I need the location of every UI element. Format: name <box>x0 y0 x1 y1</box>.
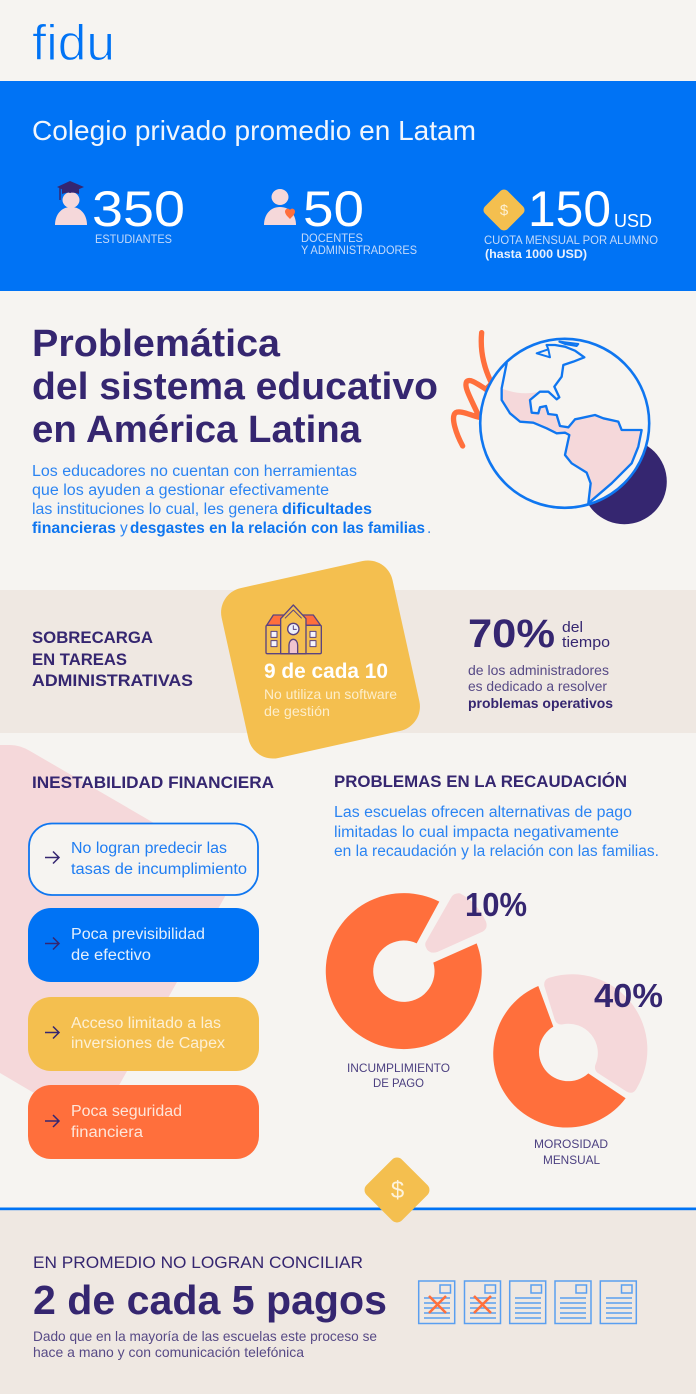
text block: alternativas <box>334 804 659 860</box>
chart: incumplimiento de pago: INCUMPLIMIENTO <box>347 1061 450 1075</box>
chart: morosidad mensual: 40% <box>594 977 663 1014</box>
card: 9 de cada 10: 9 de cada 10 <box>264 660 388 683</box>
text block: educadores: desgastes en la relación con las familias <box>130 520 425 537</box>
heading: sobrecarga <box>32 628 193 690</box>
stat: 350 estudiantes: 350 <box>92 181 185 237</box>
panel: problemas en la recaudación <box>326 772 663 1167</box>
icon: dollar diamond <box>481 187 527 233</box>
icon: teacher <box>264 189 296 225</box>
text block: educadores: financieras <box>32 520 116 537</box>
chart: incumplimiento de pago <box>326 886 527 1090</box>
icon: dollar diamond large: $ <box>391 1177 404 1204</box>
card: previsibilidad: de efectivo <box>71 947 151 964</box>
text block: 2 de cada 5 pagos: EN PROMEDIO NO LOGRAN CONCILIAR <box>33 1253 363 1272</box>
stat: 50 docentes: 50 <box>303 181 364 237</box>
illustration: globe <box>454 333 667 524</box>
icon: document 5 <box>600 1281 636 1324</box>
card: capex: Acceso limitado a las <box>71 1015 221 1032</box>
text block: educadores: las instituciones lo cual, les genera <box>32 501 278 518</box>
heading: problemática: en América Latina <box>32 409 362 451</box>
stat: 150 USD: (hasta 1000 USD) <box>485 247 587 261</box>
heading: recaudación: PROBLEMAS EN LA RECAUDACIÓN <box>334 772 627 791</box>
text block: educadores: dificultades <box>282 501 372 518</box>
text block: educadores: que los ayuden a gestionar efectivamente <box>32 482 329 499</box>
text block: 2 de cada 5 pagos <box>33 1253 387 1360</box>
icon: school <box>266 605 321 654</box>
card: seguridad <box>28 1085 259 1159</box>
logo: fidu: fidu <box>32 15 115 71</box>
chart: morosidad mensual: MENSUAL <box>543 1153 600 1167</box>
stat: 150 USD: 150 <box>528 181 611 237</box>
card: 9 de cada 10: de gestión <box>264 703 330 719</box>
stat: 150 USD: USD <box>614 211 652 231</box>
stat: 50 docentes: DOCENTES <box>301 231 363 245</box>
stat: 50 docentes: Y ADMINISTRADORES <box>301 243 417 257</box>
text block: educadores: y <box>120 520 128 537</box>
panel: inestabilidad financiera <box>28 773 274 1159</box>
text block: alternativas: limitadas lo cual impacta negativamente <box>334 824 619 841</box>
chart: morosidad mensual: MOROSIDAD <box>534 1137 608 1151</box>
icon: rejected document 2 <box>464 1281 500 1324</box>
card: tasas de incumplimiento: tasas de incumplimiento <box>71 861 247 878</box>
card: 9 de cada 10 <box>216 556 425 763</box>
text block: alternativas: Las escuelas ofrecen alternativas de pago <box>334 804 632 821</box>
stat: 70% del tiempo: del <box>562 619 583 636</box>
heading: sobrecarga: ADMINISTRATIVAS <box>32 671 193 690</box>
card: capex: inversiones de Capex <box>71 1035 225 1052</box>
card: capex <box>28 997 259 1071</box>
card: seguridad: Poca seguridad <box>71 1103 182 1120</box>
chart: morosidad mensual <box>493 974 663 1167</box>
card: 9 de cada 10: No utiliza un software <box>264 686 397 702</box>
stat: 70% del tiempo: 70% <box>468 612 555 656</box>
text block: educadores: Los educadores no cuentan con herramientas <box>32 463 357 480</box>
stat: 70% del tiempo: tiempo <box>562 634 610 651</box>
squiggle <box>454 333 492 446</box>
heading: inestabilidad: INESTABILIDAD FINANCIERA <box>32 773 274 792</box>
icon: dollar diamond large <box>362 1155 432 1225</box>
chart: incumplimiento de pago: 10% <box>465 886 527 923</box>
text block: educadores <box>32 463 431 537</box>
stat: 50 docentes <box>301 181 417 257</box>
card: tasas de incumplimiento: No logran predecir las <box>71 840 227 857</box>
heading: problemática: Problemática <box>32 323 281 365</box>
card: tasas de incumplimiento <box>29 824 258 895</box>
heading: problemática <box>32 323 438 451</box>
stat: 70% del tiempo: es dedicado a resolver <box>468 678 607 694</box>
panel: conciliar band <box>0 1209 696 1394</box>
heading: sobrecarga: SOBRECARGA <box>32 628 153 647</box>
heading: colegio privado: Colegio privado promedio en Latam <box>32 115 476 146</box>
icon: rejected document 1 <box>419 1281 455 1324</box>
stat: 150 USD <box>484 181 658 261</box>
card: previsibilidad <box>28 908 259 982</box>
icon: document 4 <box>555 1281 591 1324</box>
chart: incumplimiento de pago: DE PAGO <box>373 1076 424 1090</box>
text block: 2 de cada 5 pagos: 2 de cada 5 pagos <box>33 1277 387 1323</box>
panel: colegio privado promedio <box>0 81 696 291</box>
panel: sobrecarga band <box>0 590 696 733</box>
text block: alternativas: en la recaudación y la relación con las familias. <box>334 843 659 860</box>
text block: 2 de cada 5 pagos: Dado que en la mayoría de las escuelas este proceso se <box>33 1328 377 1344</box>
stat: 70% del tiempo: problemas operativos <box>468 695 613 711</box>
decorative pink shape <box>0 745 235 1120</box>
stat: 350 estudiantes: ESTUDIANTES <box>95 232 172 246</box>
heading: sobrecarga: EN TAREAS <box>32 650 127 669</box>
card: seguridad: financiera <box>71 1124 143 1141</box>
icon: dollar diamond: $ <box>500 202 509 219</box>
stat: 70% del tiempo: de los administradores <box>468 662 609 678</box>
stat: 70% del tiempo <box>468 612 613 711</box>
text block: educadores: . <box>427 520 431 537</box>
icon row: payment documents <box>419 1281 636 1324</box>
icon: document 3 <box>510 1281 546 1324</box>
text block: 2 de cada 5 pagos: hace a mano y con comunicación telefónica <box>33 1344 304 1360</box>
stat: 150 USD: CUOTA MENSUAL POR ALUMNO <box>484 233 658 247</box>
card: previsibilidad: Poca previsibilidad <box>71 926 205 943</box>
icon: student <box>55 181 87 225</box>
heading: problemática: del sistema educativo <box>32 366 438 408</box>
